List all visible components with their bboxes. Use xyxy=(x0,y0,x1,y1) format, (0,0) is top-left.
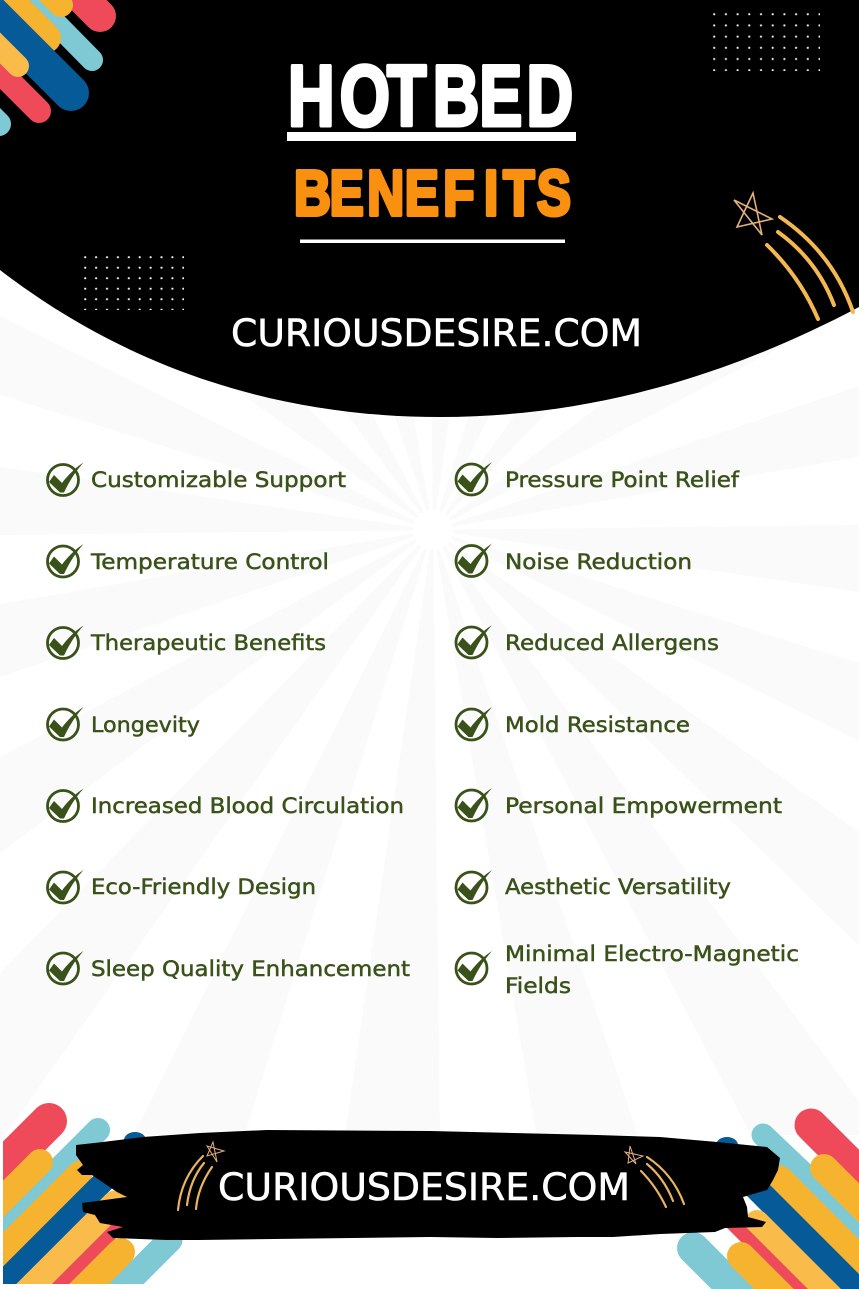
benefit: Noise Reduction xyxy=(456,544,692,576)
benefit: Sleep Quality Enhancement xyxy=(48,951,410,984)
benefit: Temperature Control xyxy=(48,544,329,577)
benefit: Minimal Electro-Magnetic Fields xyxy=(456,942,799,999)
benefit: Eco-Friendly Design xyxy=(48,870,316,903)
benefit: Therapeutic Benefits xyxy=(48,626,326,658)
benefit: Longevity: Longevity xyxy=(91,713,200,738)
benefit: Eco-Friendly Design: Eco-Friendly Design xyxy=(91,875,316,900)
black curved header panel xyxy=(0,0,859,417)
shooting star in banner right xyxy=(625,1146,684,1207)
title: HOTBED: HOTBED xyxy=(288,49,573,145)
benefit: Pressure Point Relief xyxy=(456,462,739,495)
benefit: Sleep Quality Enhancement: Sleep Quality Enhancement xyxy=(91,957,410,982)
subtitle underline xyxy=(300,240,565,243)
benefits list: right column xyxy=(456,462,799,999)
benefit: Therapeutic Benefits: Therapeutic Benefits xyxy=(90,631,326,656)
shooting star top right xyxy=(734,193,853,319)
bottom-left colored stripes xyxy=(0,1121,170,1289)
benefit: Mold Resistance xyxy=(456,707,690,740)
benefit: Temperature Control: Temperature Control xyxy=(90,550,329,575)
benefit: Aesthetic Versatility xyxy=(456,870,731,903)
subtitle: BENEFITS: BENEFITS xyxy=(294,159,571,229)
benefit: Personal Empowerment xyxy=(456,788,782,821)
banner website text: CURIOUSDESIRE.COM xyxy=(218,1166,630,1209)
dot grid left xyxy=(83,255,184,310)
benefit: Reduced Allergens: Reduced Allergens xyxy=(505,631,719,656)
website heading: CURIOUSDESIRE.COM xyxy=(231,312,642,355)
benefit: Aesthetic Versatility: Aesthetic Versatility xyxy=(505,875,731,900)
benefit: Personal Empowerment: Personal Empowerment xyxy=(505,794,782,819)
benefit: Reduced Allergens xyxy=(456,625,719,658)
benefits list: left column xyxy=(48,462,410,984)
benefit: Noise Reduction: Noise Reduction xyxy=(505,550,692,575)
benefit: Increased Blood Circulation: Increased Blood Circulation xyxy=(91,794,404,819)
title underline xyxy=(287,132,576,141)
benefit: Customizable Support xyxy=(48,462,346,496)
benefit: Minimal Electro-Magnetic Fields: Fields xyxy=(505,974,571,999)
benefit: Longevity xyxy=(48,707,200,740)
benefit: Customizable Support: Customizable Support xyxy=(91,468,346,493)
black brush banner xyxy=(76,1130,780,1240)
top-left colored stripes xyxy=(0,0,100,124)
benefit: Mold Resistance: Mold Resistance xyxy=(505,713,690,738)
bottom-right colored stripes xyxy=(693,1125,859,1289)
dot grid top right xyxy=(712,12,820,71)
benefit: Pressure Point Relief: Pressure Point Relief xyxy=(505,468,739,493)
benefit: Increased Blood Circulation xyxy=(48,788,404,822)
shooting star in banner left xyxy=(178,1142,224,1210)
benefit: Minimal Electro-Magnetic Fields: Minimal Electro-Magnetic xyxy=(505,942,799,967)
